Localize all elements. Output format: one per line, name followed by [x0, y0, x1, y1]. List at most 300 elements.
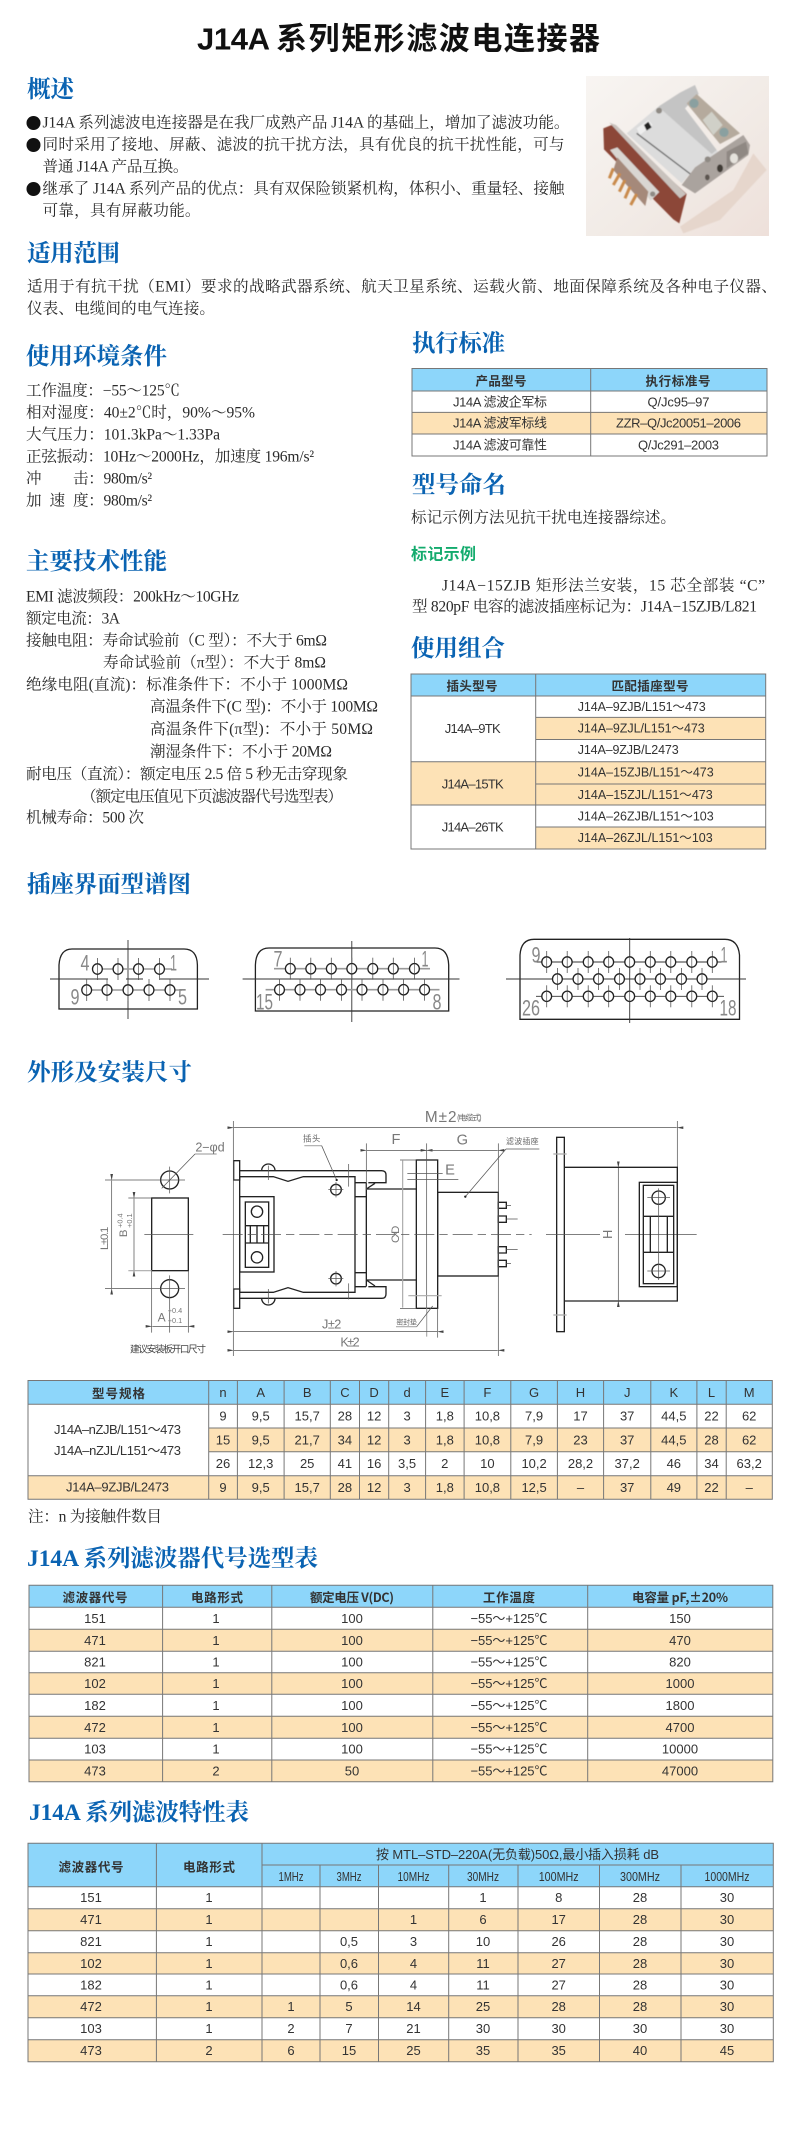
- overview bullet list: 可靠，具有屏蔽功能。: [42, 202, 200, 220]
- filter code rows: 1: [212, 1676, 220, 1691]
- filter code rows: 1000: [666, 1676, 694, 1691]
- filter code rows: [84, 1611, 698, 1778]
- dimension rows: 12: [367, 1480, 381, 1495]
- characteristics rows: 21: [406, 2021, 421, 2036]
- diagram: 9-pin interface: 1: [170, 950, 177, 976]
- filter code rows: 472: [84, 1720, 106, 1735]
- characteristics rows: 0,5: [340, 1934, 358, 1949]
- filter code rows: 100: [341, 1633, 363, 1648]
- characteristics rows: 27: [551, 1956, 566, 1971]
- filter code header: 额定电压 V(DC): [310, 1587, 394, 1606]
- heading: filter code table: J14A 系列滤波器代号选型表: [27, 1545, 318, 1572]
- characteristics rows: 5: [345, 1999, 353, 2014]
- characteristics rows: 102: [80, 1956, 102, 1971]
- dimension rows: [54, 1408, 762, 1495]
- section: outline and mounting dimensions: [27, 1059, 697, 1356]
- characteristics rows: 28: [633, 1956, 647, 1971]
- characteristics rows: 472: [80, 1999, 102, 2014]
- filter code rows: −55～+125℃: [470, 1611, 548, 1626]
- drawing: panel cutout: L±0.1: [99, 1227, 111, 1250]
- heading: scope: 适用范围: [27, 240, 120, 267]
- table: combinations: J14A–15ZJL/L151～473: [578, 788, 713, 802]
- dimension header row: F: [483, 1385, 491, 1400]
- drawing: connector side view: 滤波插座: [506, 1136, 539, 1147]
- characteristics rows: 8: [555, 1890, 562, 1905]
- filter code rows: −55～+125℃: [470, 1633, 548, 1648]
- dimension rows: J14A–nZJB/L151～473: [54, 1422, 181, 1437]
- drawing: connector side view: (电缆式): [457, 1112, 482, 1123]
- performance list: 高温条件下(C 型)：不小于 100MΩ: [150, 696, 378, 716]
- filter code rows: 100: [341, 1720, 363, 1735]
- dimension rows: 46: [667, 1456, 681, 1471]
- dimension rows: 44,5: [661, 1432, 686, 1448]
- dimension rows: 7,9: [525, 1408, 543, 1424]
- characteristics rows: 1: [205, 2021, 213, 2036]
- scope text: [27, 276, 777, 318]
- dimension rows: 12: [367, 1432, 381, 1448]
- characteristics header: 100MHz: [539, 1869, 579, 1884]
- dimension rows: 49: [667, 1480, 681, 1495]
- dimension rows: 12,5: [521, 1480, 547, 1495]
- drawing: connector end view: [546, 1137, 697, 1332]
- dimension header row: [92, 1383, 755, 1402]
- note: n meaning: 注：n 为接触件数目: [28, 1508, 162, 1526]
- characteristics rows: 471: [80, 1912, 102, 1927]
- filter code rows: 1: [212, 1654, 220, 1670]
- characteristics rows: 35: [476, 2043, 490, 2058]
- environment list: 正弦振动：10Hz～2000Hz，加速度 196m/s²: [26, 448, 314, 466]
- dimension rows: J14A–9ZJB/L2473: [66, 1480, 169, 1494]
- table: standards: J14A 滤波军标线: [453, 416, 547, 430]
- scope text: 适用于有抗干扰（EMI）要求的战略武器系统、航天卫星系统、运载火箭、地面保障系统及各种电子仪器、: [27, 276, 777, 296]
- characteristics rows: 1: [479, 1890, 487, 1905]
- dimension header row: G: [529, 1385, 539, 1400]
- heading: environment: 使用环境条件: [26, 343, 168, 370]
- dimension rows: 10: [480, 1456, 495, 1471]
- performance list: 高温条件下(π型)：不小于 50MΩ: [150, 719, 373, 738]
- filter code rows: 50: [345, 1763, 359, 1778]
- filter code rows: 4700: [666, 1720, 694, 1735]
- filter code rows: 10000: [662, 1742, 698, 1757]
- title: 系列矩形滤波电连接器: [276, 22, 600, 56]
- filter code rows: 100: [341, 1676, 363, 1691]
- characteristics rows: 11: [476, 1978, 490, 1992]
- table: combinations: J14A–9ZJB/L2473: [578, 743, 679, 757]
- overview bullet list: 普通 J14A 产品互换。: [42, 158, 188, 176]
- filter code rows: 471: [84, 1633, 106, 1648]
- dimension rows: 62: [742, 1408, 756, 1424]
- characteristics header: 10MHz: [398, 1869, 430, 1884]
- dimension header row: K: [669, 1385, 678, 1400]
- drawing: panel cutout: A: [158, 1310, 166, 1324]
- dimension rows: 15: [216, 1432, 230, 1448]
- characteristics rows: 11: [476, 1956, 490, 1971]
- characteristics rows: 1: [205, 1912, 213, 1927]
- dimension rows: 3,5: [398, 1456, 416, 1471]
- dimension rows: 1,8: [436, 1408, 454, 1424]
- environment list: 相对湿度：40±2℃时，90%～95%: [26, 404, 255, 422]
- dimension rows: 10,2: [521, 1456, 547, 1471]
- diagram: 26-pin interface: 9: [532, 942, 540, 968]
- characteristics rows: 103: [80, 2021, 102, 2036]
- dimension header row: A: [256, 1385, 265, 1400]
- drawing: panel cutout: +0.1: [125, 1213, 134, 1228]
- dimension rows: –: [577, 1480, 585, 1495]
- table: combinations: J14A–15TK: [442, 776, 504, 792]
- table: combinations: J14A–26TK: [442, 820, 504, 834]
- characteristics rows: 30: [551, 2021, 566, 2036]
- performance list: （额定电压值见下页滤波器代号选型表）: [81, 786, 343, 806]
- title: J14A: [197, 22, 270, 56]
- dimension rows: 1,8: [436, 1480, 454, 1495]
- dimension header row: d: [403, 1385, 411, 1400]
- overview bullet list: 继承了 J14A 系列产品的优点：具有双保险锁紧机构，体积小、重量轻、接触: [42, 178, 565, 198]
- drawing: panel cutout and connector outline: [99, 1109, 697, 1356]
- section: technical performance: [26, 548, 378, 826]
- filter code rows: −55～+125℃: [470, 1698, 548, 1713]
- dimension header row: L: [708, 1385, 715, 1400]
- characteristics rows: 15: [342, 2043, 356, 2058]
- characteristics rows: 10: [476, 1934, 490, 1949]
- dimension rows: 22: [704, 1480, 719, 1495]
- environment list: 大气压力：101.3kPa～1.33Pa: [26, 426, 220, 444]
- drawing: panel cutout: B: [118, 1230, 130, 1237]
- filter code rows: 473: [84, 1763, 106, 1778]
- filter code rows: 182: [84, 1698, 106, 1713]
- overview bullet list: [26, 114, 570, 220]
- table: combinations: 匹配插座型号: [612, 676, 688, 694]
- dimension rows: 7,9: [525, 1432, 543, 1448]
- filter code rows: 821: [84, 1654, 106, 1670]
- table: combinations: J14A–26ZJL/L151～103: [578, 831, 713, 845]
- dimension rows: 2: [441, 1456, 448, 1471]
- heading: performance: 主要技术性能: [26, 548, 167, 575]
- characteristics rows: 30: [720, 1890, 734, 1905]
- filter code rows: 100: [341, 1698, 363, 1713]
- dimension rows: 37,2: [615, 1456, 640, 1471]
- characteristics rows: 30: [720, 1912, 734, 1927]
- performance list: 耐电压（直流）：额定电压 2.5 倍 5 秒无击穿现象: [26, 765, 348, 783]
- characteristics header: 滤波器代号: [58, 1856, 124, 1876]
- dimension header row: H: [576, 1385, 585, 1400]
- drawing: panel cutout: +0.4: [168, 1306, 182, 1315]
- table: standards: J14A 滤波可靠性: [453, 438, 547, 452]
- drawing: connector side view: J±2: [322, 1317, 341, 1331]
- table: standards: J14A 滤波企军标: [453, 394, 547, 410]
- characteristics rows: 473: [80, 2043, 102, 2058]
- naming text: 标记示例方法见抗干扰电连接器综述。: [411, 508, 676, 526]
- section: filter characteristics: [28, 1799, 773, 2062]
- performance list: 额定电流：3A: [26, 610, 121, 628]
- filter code rows: 100: [341, 1742, 363, 1757]
- dimension rows: 26: [216, 1456, 230, 1471]
- dimension rows: 12: [367, 1408, 381, 1424]
- characteristics rows: 6: [287, 2043, 295, 2058]
- dimension rows: 21,7: [295, 1432, 320, 1448]
- characteristics rows: 27: [551, 1978, 566, 1992]
- table: standards: Q/Jc291–2003: [638, 438, 719, 452]
- performance list: 寿命试验前（π型）：不大于 8mΩ: [103, 654, 326, 672]
- dimension rows: 12,3: [248, 1456, 273, 1471]
- characteristics rows: 1: [287, 1999, 295, 2014]
- characteristics header: 3MHz: [336, 1869, 362, 1884]
- dimension rows: 15,7: [295, 1408, 320, 1424]
- overview bullet list: 同时采用了接地、屏蔽、滤波的抗干扰方法，具有优良的抗干扰性能，可与: [42, 134, 564, 154]
- section: overview: [26, 76, 570, 220]
- drawing: panel cutout: 建议安装板开口尺寸: [130, 1341, 206, 1355]
- dimension rows: 37: [620, 1432, 634, 1448]
- performance list: [26, 588, 378, 826]
- characteristics rows: 30: [720, 1978, 734, 1992]
- characteristics header: 30MHz: [467, 1869, 499, 1884]
- filter code rows: 100: [341, 1611, 363, 1626]
- dimension rows: 17: [573, 1408, 588, 1424]
- dimension rows: J14A–nZJL/L151～473: [54, 1443, 181, 1458]
- filter code rows: −55～+125℃: [470, 1676, 548, 1691]
- drawing: panel cutout: [99, 1140, 225, 1355]
- characteristics rows: 30: [633, 2021, 647, 2036]
- dimension rows: 28,2: [568, 1456, 593, 1471]
- dimension rows: 16: [367, 1456, 381, 1471]
- characteristics header: 300MHz: [620, 1869, 660, 1884]
- heading: interface diagrams: 插座界面型谱图: [27, 871, 191, 898]
- filter code rows: 100: [341, 1654, 363, 1670]
- characteristics rows: 28: [633, 1999, 647, 2014]
- filter code rows: 1: [212, 1742, 220, 1757]
- characteristics rows: 151: [80, 1890, 102, 1905]
- filter code rows: −55～+125℃: [470, 1654, 548, 1670]
- filter code rows: −55～+125℃: [470, 1742, 548, 1757]
- dimension rows: 3: [403, 1480, 411, 1495]
- table: combinations: 插头型号: [446, 676, 498, 694]
- dimension rows: –: [746, 1480, 754, 1495]
- characteristics rows: 821: [80, 1934, 102, 1949]
- dimension rows: 9: [219, 1408, 227, 1424]
- characteristics rows: 1: [205, 1934, 213, 1949]
- marking example text: J14A−15ZJB 矩形法兰安装，15 芯全部装 “C”: [442, 576, 765, 594]
- characteristics rows: 26: [551, 1934, 566, 1949]
- filter code rows: 2: [212, 1763, 220, 1778]
- environment list: 速: [50, 492, 66, 510]
- table: filter characteristics: [28, 1843, 773, 2062]
- performance list: 机械寿命：500 次: [26, 808, 144, 826]
- section: socket interface diagrams: [27, 871, 746, 1023]
- characteristics rows: 40: [633, 2043, 647, 2058]
- dimension rows: 28: [338, 1408, 352, 1424]
- dimension rows: 3: [403, 1432, 411, 1448]
- filter code header: 工作温度: [483, 1587, 535, 1606]
- section: mating combinations: [411, 635, 766, 849]
- filter code rows: 1: [212, 1720, 220, 1735]
- filter code rows: 1800: [666, 1698, 694, 1713]
- filter code rows: 151: [84, 1611, 106, 1626]
- drawing: connector side view: 密封垫: [396, 1317, 417, 1327]
- dimension header row: J: [624, 1385, 630, 1400]
- section: model naming: [411, 472, 765, 616]
- performance list: 接触电阻：寿命试验前（C 型）：不大于 6mΩ: [26, 632, 327, 650]
- table: filter code selection: [29, 1585, 773, 1782]
- performance list: 潮湿条件下：不小于 20MΩ: [150, 742, 332, 760]
- filter code rows: 820: [669, 1654, 691, 1670]
- environment list: 冲: [26, 470, 42, 488]
- table: combinations: [411, 674, 766, 849]
- filter code rows: 470: [669, 1633, 691, 1648]
- dimension rows: 41: [338, 1456, 352, 1471]
- filter code rows: 1: [212, 1611, 220, 1626]
- environment list: 工作温度：−55～125℃: [26, 382, 180, 400]
- characteristics rows: 2: [205, 2043, 213, 2058]
- dimension rows: 28: [338, 1480, 352, 1495]
- diagram: 15-pin interface: 8: [432, 990, 442, 1014]
- dimension header row: B: [303, 1385, 312, 1400]
- characteristics rows: 1: [205, 1978, 213, 1992]
- diagram: 26-pin interface: 1: [720, 942, 728, 968]
- filter code header: 电容量 pF,±20%: [632, 1587, 728, 1606]
- dimension rows: 37: [620, 1480, 634, 1495]
- characteristics rows: 30: [720, 1956, 734, 1971]
- photo: connector: [586, 76, 769, 236]
- diagram: 9-pin interface: 9: [70, 984, 80, 1010]
- table: standards: [412, 368, 767, 456]
- table: combinations: J14A–9ZJL/L151～473: [578, 722, 705, 736]
- section: environment conditions: [26, 343, 314, 510]
- filter code header: 电路形式: [191, 1587, 243, 1606]
- diagram: 15-pin interface: 1: [422, 946, 428, 972]
- characteristics rows: [80, 1890, 734, 2058]
- dimension rows: 15,7: [295, 1480, 320, 1495]
- characteristics rows: 28: [551, 1999, 566, 2014]
- diagram: 9-pin interface: 5: [178, 984, 187, 1010]
- dimension rows: 34: [338, 1432, 352, 1448]
- heading: combinations: 使用组合: [411, 635, 505, 662]
- overview bullet list: J14A 系列滤波电连接器是在我厂成熟产品 J14A 的基础上，增加了滤波功能。: [42, 114, 570, 132]
- filter code header: [62, 1587, 728, 1606]
- characteristics rows: 0,6: [340, 1956, 358, 1971]
- dimension rows: 10,8: [475, 1408, 500, 1424]
- section: standards: [412, 330, 767, 456]
- characteristics rows: 28: [633, 1890, 647, 1905]
- table: combinations: J14A–9ZJB/L151～473: [578, 700, 706, 714]
- drawing: connector side view: 插头: [303, 1132, 320, 1144]
- drawing: connector side view: E: [445, 1163, 455, 1179]
- dimension rows: 25: [300, 1456, 314, 1471]
- diagram: 15-pin interface: 7: [274, 946, 282, 972]
- dimension rows: 37: [620, 1408, 634, 1424]
- table: standards: 执行标准号: [646, 370, 710, 390]
- diagram: 26-pin interface: 18: [720, 996, 736, 1020]
- characteristics rows: 25: [406, 2043, 421, 2058]
- drawing: connector side view: [223, 1109, 677, 1356]
- characteristics rows: 17: [551, 1912, 566, 1927]
- section: filter code selection: [27, 1545, 773, 1782]
- filter code rows: 103: [84, 1742, 106, 1757]
- characteristics rows: 28: [633, 1934, 647, 1949]
- diagram: 26-pin interface: [506, 938, 746, 1023]
- drawing: connector side view: G: [457, 1133, 468, 1149]
- dimension rows: 63,2: [737, 1456, 762, 1471]
- characteristics rows: 1: [410, 1912, 417, 1927]
- drawing: panel cutout: +0.4: [115, 1213, 124, 1228]
- drawing: connector side view: K±2: [340, 1336, 360, 1350]
- dimension header row: 型号规格: [92, 1383, 145, 1402]
- performance list: 绝缘电阻(直流)：标准条件下：不小于 1000MΩ: [26, 676, 348, 694]
- table: standards: Q/Jc95–97: [648, 394, 710, 410]
- dimension rows: 9,5: [252, 1408, 270, 1424]
- table: dimensions: [28, 1380, 772, 1499]
- table: combinations: J14A–9TK: [445, 721, 501, 736]
- diagram: 9-pin interface: 4: [80, 950, 90, 976]
- scope text: 仪表、电缆间的电气连接。: [27, 298, 215, 318]
- diagram: 26-pin interface: 26: [522, 996, 540, 1020]
- drawing: connector side view: C×D: [390, 1226, 402, 1243]
- dimension rows: 10,8: [475, 1480, 500, 1495]
- filter code rows: −55～+125℃: [470, 1720, 548, 1735]
- dimension header row: D: [369, 1385, 379, 1400]
- marking example text: [412, 576, 765, 616]
- heading: model naming: 型号命名: [412, 472, 506, 498]
- environment list: 度：980m/s²: [73, 492, 152, 510]
- dimension rows: 9: [219, 1480, 227, 1495]
- characteristics rows: 3: [410, 1934, 417, 1949]
- characteristics rows: 30: [720, 1934, 734, 1949]
- heading: overview: 概述: [27, 76, 76, 103]
- drawing: connector side view: F: [392, 1132, 401, 1148]
- characteristics header: 按 MTL–STD–220A(无负载)50Ω,最小插入损耗 dB: [376, 1847, 659, 1862]
- dimension rows: 23: [573, 1432, 588, 1448]
- characteristics rows: 30: [720, 2021, 734, 2036]
- section: scope: [27, 240, 777, 318]
- heading: outline dimensions: 外形及安装尺寸: [27, 1059, 192, 1086]
- characteristics header: 1MHz: [278, 1869, 304, 1884]
- dimension rows: 1,8: [436, 1432, 454, 1448]
- characteristics rows: 4: [410, 1956, 417, 1971]
- characteristics rows: 182: [80, 1978, 102, 1992]
- filter code rows: 1: [212, 1698, 220, 1713]
- drawing: panel cutout: +0.1: [168, 1316, 182, 1325]
- characteristics header: 电路形式: [183, 1856, 235, 1876]
- dimension header row: n: [219, 1385, 227, 1400]
- characteristics rows: 1: [205, 1999, 213, 2014]
- dimension rows: 9,5: [252, 1480, 270, 1495]
- environment list: [26, 382, 314, 510]
- dimension rows: 44,5: [661, 1408, 686, 1424]
- heading: standards: 执行标准: [412, 330, 506, 357]
- characteristics header: [58, 1847, 750, 1884]
- characteristics rows: 2: [287, 2021, 295, 2036]
- heading: filter characteristics: J14A 系列滤波特性表: [29, 1799, 249, 1826]
- filter code rows: 47000: [662, 1763, 698, 1778]
- characteristics rows: 28: [633, 1912, 647, 1927]
- filter code rows: 102: [84, 1676, 106, 1691]
- drawing: panel cutout: 2−φd: [195, 1140, 225, 1154]
- table: combinations: J14A–15ZJB/L151～473: [578, 765, 714, 779]
- drawing: connector side view: M±2: [425, 1109, 456, 1126]
- characteristics rows: 0,6: [340, 1978, 358, 1992]
- dimension rows: 9,5: [252, 1432, 270, 1448]
- characteristics rows: 28: [633, 1978, 647, 1992]
- diagram: 15-pin interface: [243, 941, 460, 1022]
- diagram: 9-pin interface: [50, 940, 209, 1019]
- dimension rows: 34: [704, 1456, 719, 1471]
- subheading: marking example: 标记示例: [411, 540, 476, 564]
- dimension rows: 10,8: [475, 1432, 500, 1448]
- characteristics rows: 7: [345, 2021, 353, 2036]
- characteristics rows: 4: [410, 1978, 417, 1992]
- table: standards: 产品型号: [476, 370, 526, 390]
- dimension rows: 22: [704, 1408, 719, 1424]
- marking example text: 型 820pF 电容的滤波插座标记为：J14A−15ZJB/L821: [412, 596, 757, 616]
- table: standards: ZZR–Q/Jc20051–2006: [616, 416, 741, 430]
